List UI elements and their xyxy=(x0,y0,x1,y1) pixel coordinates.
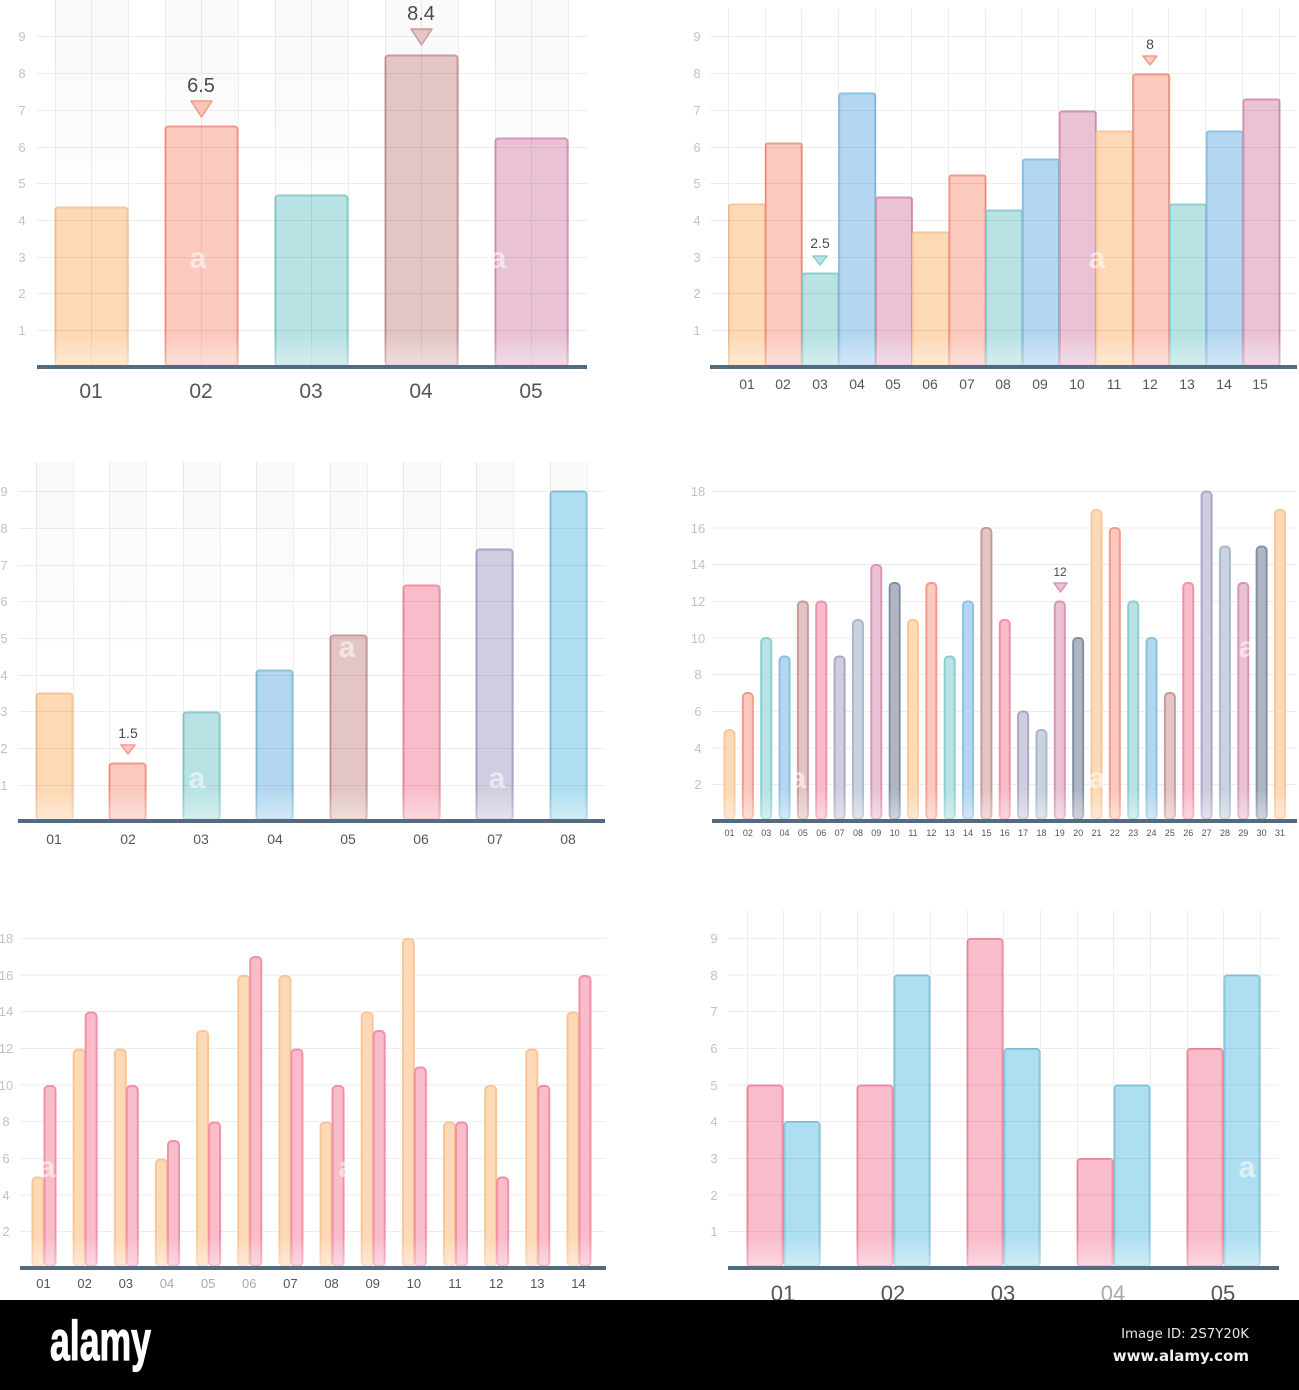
chart 2 x axis labels: 07 xyxy=(959,376,975,392)
chart 1 y axis labels: 9 xyxy=(18,29,26,44)
chart 4 x axis labels: 22 xyxy=(1110,828,1120,838)
chart 4 x axis labels: 31 xyxy=(1275,828,1285,838)
chart 4 y axis labels: 18 xyxy=(691,484,705,499)
chart 5 x axis labels: 06 xyxy=(242,1276,256,1291)
chart 6 x axis labels: 02 xyxy=(881,1281,905,1306)
footer bar xyxy=(0,1300,1299,1390)
callout 12 xyxy=(1053,565,1067,592)
watermark glyphs: a xyxy=(1089,242,1106,275)
chart 4 x axis labels: 12 xyxy=(926,828,936,838)
chart 5 x axis labels: 11 xyxy=(448,1276,462,1291)
chart 4 y axis labels: 10 xyxy=(691,631,705,646)
chart 1 y axis labels: 1 xyxy=(18,323,26,338)
chart 4 x axis labels: 18 xyxy=(1036,828,1046,838)
chart 5: fourteen paired bars xyxy=(0,931,606,1291)
chart 2 y axis labels: 7 xyxy=(693,103,701,118)
chart 6 y axis labels: 2 xyxy=(710,1188,718,1203)
chart 3 y axis labels xyxy=(0,484,8,793)
chart 6 x axis labels: 04 xyxy=(1101,1281,1125,1306)
chart 5 x axis labels: 13 xyxy=(530,1276,545,1291)
chart 2 y axis labels: 9 xyxy=(693,29,701,44)
watermark glyphs: a xyxy=(790,762,807,795)
chart 5 x axis labels: 14 xyxy=(571,1276,586,1291)
chart 2 y axis labels: 3 xyxy=(693,250,701,265)
callout 1.5: 1.5 xyxy=(118,725,138,741)
chart 1 y axis labels: 6 xyxy=(18,140,26,155)
chart 4 x axis labels: 28 xyxy=(1220,828,1230,838)
chart 2 x axis labels: 15 xyxy=(1252,376,1268,392)
chart 1 y axis labels: 2 xyxy=(18,286,26,301)
chart 6 x axis labels xyxy=(771,1281,1235,1306)
chart 2 x axis labels: 04 xyxy=(849,376,865,392)
chart 6 y axis labels: 3 xyxy=(710,1151,718,1166)
chart 3 y axis labels: 4 xyxy=(0,668,8,683)
chart 3 y axis labels: 8 xyxy=(0,521,8,536)
chart 1 x axis labels xyxy=(79,380,543,403)
callout 8: 8 xyxy=(1146,36,1154,52)
chart 4 x axis labels: 15 xyxy=(981,828,991,838)
chart 1 y axis labels: 4 xyxy=(18,213,26,228)
watermark glyphs: a xyxy=(1239,631,1256,664)
callout 8.4: 8.4 xyxy=(407,3,435,25)
chart 4 x axis labels: 30 xyxy=(1257,828,1267,838)
chart 4 x axis labels: 05 xyxy=(798,828,808,838)
chart 4 y axis labels xyxy=(691,484,705,792)
chart 6 y axis labels: 8 xyxy=(710,968,718,983)
chart 2 x axis labels: 08 xyxy=(995,376,1011,392)
chart 5 x axis labels: 10 xyxy=(407,1276,421,1291)
chart 4 bars xyxy=(724,492,1285,819)
chart 4 axis xyxy=(712,819,1297,823)
chart 4 x axis labels: 13 xyxy=(945,828,955,838)
chart 4 x axis labels: 25 xyxy=(1165,828,1175,838)
chart 2 x axis labels xyxy=(739,376,1268,392)
chart 5 x axis labels: 01 xyxy=(36,1276,51,1291)
chart 3 x axis labels xyxy=(46,831,576,847)
chart 5 y axis labels: 2 xyxy=(2,1224,10,1239)
chart 4 x axis labels: 17 xyxy=(1018,828,1028,838)
chart 3 y axis labels: 5 xyxy=(0,631,8,646)
chart 2 y axis labels: 1 xyxy=(693,323,701,338)
chart 4 x axis labels: 29 xyxy=(1238,828,1248,838)
chart 1 y axis labels: 5 xyxy=(18,176,26,191)
chart 6 pink bars xyxy=(748,939,1222,1266)
chart 4 x axis labels: 09 xyxy=(871,828,881,838)
chart 1: five bars xyxy=(18,0,587,403)
chart 2: fifteen bars xyxy=(693,9,1297,392)
chart 5 y axis labels: 4 xyxy=(2,1188,10,1203)
chart 3 bars xyxy=(36,492,586,820)
callout 6.5 xyxy=(187,75,215,117)
chart 3 x axis labels: 03 xyxy=(193,831,209,847)
chart 3 x axis labels: 08 xyxy=(560,831,576,847)
chart 2 y axis labels: 2 xyxy=(693,286,701,301)
chart 6 y axis labels: 6 xyxy=(710,1041,718,1056)
watermark glyphs: a xyxy=(490,242,507,275)
chart 5 x axis labels: 02 xyxy=(77,1276,92,1291)
watermark glyphs: a xyxy=(39,1151,56,1184)
chart 2 y axis labels: 4 xyxy=(693,213,701,228)
chart 4 x axis labels: 07 xyxy=(835,828,845,838)
chart 1 x axis labels: 04 xyxy=(409,380,433,403)
chart 2 x axis labels: 14 xyxy=(1216,376,1232,392)
chart 1 x axis labels: 05 xyxy=(519,380,543,403)
chart 4 x axis labels: 27 xyxy=(1202,828,1212,838)
chart 1 y axis labels: 7 xyxy=(18,103,26,118)
watermark glyphs: a xyxy=(489,762,506,795)
callout 8 xyxy=(1143,36,1157,65)
watermark glyphs: a xyxy=(339,1151,356,1184)
chart 5 x axis labels: 04 xyxy=(160,1276,174,1291)
chart 4 x axis labels: 02 xyxy=(743,828,753,838)
watermark glyphs: a xyxy=(189,762,206,795)
chart 5 orange bars xyxy=(32,939,578,1266)
chart 6 y axis labels xyxy=(710,931,718,1239)
chart 4 x axis labels: 20 xyxy=(1073,828,1083,838)
chart 3 y axis labels: 6 xyxy=(0,594,8,609)
chart 5 x axis labels: 08 xyxy=(324,1276,339,1291)
chart 2 x axis labels: 06 xyxy=(922,376,938,392)
chart 6 y axis labels: 7 xyxy=(710,1004,718,1019)
chart 3 y axis labels: 3 xyxy=(0,704,8,719)
chart 3 axis xyxy=(18,819,605,823)
chart 4 y axis labels: 4 xyxy=(694,741,702,756)
chart 1 axis xyxy=(37,365,587,369)
watermark glyphs: a xyxy=(190,242,207,275)
chart 5 pink bars xyxy=(44,957,590,1266)
chart 2 x axis labels: 10 xyxy=(1069,376,1085,392)
chart 2 x axis labels: 01 xyxy=(739,376,755,392)
watermark glyphs: a xyxy=(1239,1151,1256,1184)
chart 4 x axis labels: 04 xyxy=(780,828,790,838)
chart 4 x axis labels: 10 xyxy=(890,828,900,838)
chart 6: five paired bars xyxy=(710,910,1279,1306)
chart 4 x axis labels: 14 xyxy=(963,828,973,838)
image id: Image ID: 2S7Y20K xyxy=(1121,1327,1249,1342)
chart 2 x axis labels: 02 xyxy=(775,376,791,392)
chart 4 x axis labels: 19 xyxy=(1055,828,1065,838)
chart 3 x axis labels: 02 xyxy=(120,831,136,847)
chart 2 y axis labels xyxy=(693,29,701,338)
chart 4: thirty-one bars xyxy=(691,484,1297,838)
chart 4 y axis labels: 8 xyxy=(694,667,702,682)
chart 5 x axis labels: 03 xyxy=(119,1276,133,1291)
chart 4 y axis labels: 14 xyxy=(691,557,705,572)
chart 2 x axis labels: 11 xyxy=(1107,376,1121,392)
chart 4 y axis labels: 16 xyxy=(691,521,705,536)
chart 4 x axis labels: 26 xyxy=(1183,828,1193,838)
chart 3 x axis labels: 04 xyxy=(267,831,283,847)
chart 2 axis xyxy=(710,365,1297,369)
chart 6 y axis labels: 9 xyxy=(710,931,718,946)
chart 2 x axis labels: 03 xyxy=(812,376,828,392)
callout 12: 12 xyxy=(1053,565,1067,579)
chart 3 y axis labels: 9 xyxy=(0,484,8,499)
chart 2 x axis labels: 09 xyxy=(1032,376,1048,392)
chart 6 y axis labels: 4 xyxy=(710,1114,718,1129)
chart 1 y axis labels xyxy=(18,29,26,338)
chart 2 x axis labels: 05 xyxy=(885,376,901,392)
chart 5 y axis labels: 6 xyxy=(2,1151,10,1166)
callout 1.5 xyxy=(118,725,138,754)
logo: alamy: alamy xyxy=(50,1309,151,1372)
chart 3: eight bars xyxy=(0,462,605,847)
chart 2 x axis labels: 13 xyxy=(1179,376,1195,392)
chart 4 x axis labels: 16 xyxy=(1000,828,1010,838)
chart 3 y axis labels: 1 xyxy=(0,778,8,793)
chart 2 y axis labels: 6 xyxy=(693,140,701,155)
chart 5 axis xyxy=(20,1266,606,1270)
chart 2 bars xyxy=(729,74,1280,366)
chart 6 x axis labels: 05 xyxy=(1211,1281,1235,1306)
chart 4 x axis labels: 06 xyxy=(816,828,826,838)
chart 3 x axis labels: 06 xyxy=(413,831,429,847)
chart 4 x axis labels: 03 xyxy=(761,828,771,838)
chart 4 x axis labels: 08 xyxy=(853,828,863,838)
chart 3 x axis labels: 05 xyxy=(340,831,356,847)
chart 6 blue bars xyxy=(784,976,1260,1266)
chart 6 x axis labels: 01 xyxy=(771,1281,795,1306)
chart 3 y axis labels: 7 xyxy=(0,558,8,573)
chart 2 y axis labels: 8 xyxy=(693,66,701,81)
chart 5 y axis labels: 8 xyxy=(2,1114,10,1129)
watermark glyphs: a xyxy=(339,631,356,664)
watermark glyphs xyxy=(39,242,1256,1184)
chart 5 x axis labels: 07 xyxy=(283,1276,298,1291)
chart 3 y axis labels: 2 xyxy=(0,741,8,756)
callout 6.5: 6.5 xyxy=(187,75,215,97)
chart 4 x axis labels: 11 xyxy=(908,828,918,838)
callout 8.4 xyxy=(407,3,435,45)
website: www.alamy.com xyxy=(1113,1347,1249,1365)
chart 4 x axis labels: 21 xyxy=(1091,828,1102,838)
chart 4 y axis labels: 12 xyxy=(691,594,705,609)
chart 5 x axis labels: 09 xyxy=(365,1276,380,1291)
chart 6 x axis labels: 03 xyxy=(991,1281,1015,1306)
watermark glyphs: a xyxy=(1089,762,1106,795)
chart 1 bars xyxy=(56,56,568,366)
chart 5 y axis labels xyxy=(0,931,13,1239)
chart 4 x axis labels xyxy=(724,828,1285,838)
callout 2.5: 2.5 xyxy=(810,235,830,251)
chart 5 x axis labels: 05 xyxy=(201,1276,215,1291)
chart 3 x axis labels: 07 xyxy=(487,831,503,847)
chart 2 y axis labels: 5 xyxy=(693,176,701,191)
callout 2.5 xyxy=(810,235,830,265)
chart 1 x axis labels: 01 xyxy=(79,380,103,403)
chart 1 x axis labels: 03 xyxy=(299,380,323,403)
chart 1 y axis labels: 3 xyxy=(18,250,26,265)
chart 4 x axis labels: 01 xyxy=(724,828,735,838)
chart 3 x axis labels: 01 xyxy=(46,831,62,847)
chart 6 y axis labels: 5 xyxy=(710,1078,718,1093)
chart 2 x axis labels: 12 xyxy=(1142,376,1158,392)
chart 4 x axis labels: 24 xyxy=(1147,828,1157,838)
chart 5 x axis labels xyxy=(36,1276,586,1291)
chart 4 y axis labels: 2 xyxy=(694,777,702,792)
chart 4 y axis labels: 6 xyxy=(694,704,702,719)
chart 6 axis xyxy=(728,1266,1279,1270)
chart 1 x axis labels: 02 xyxy=(189,380,213,403)
chart 4 x axis labels: 23 xyxy=(1128,828,1138,838)
chart 1 y axis labels: 8 xyxy=(18,66,26,81)
chart 6 y axis labels: 1 xyxy=(710,1224,718,1239)
chart 5 x axis labels: 12 xyxy=(489,1276,503,1291)
